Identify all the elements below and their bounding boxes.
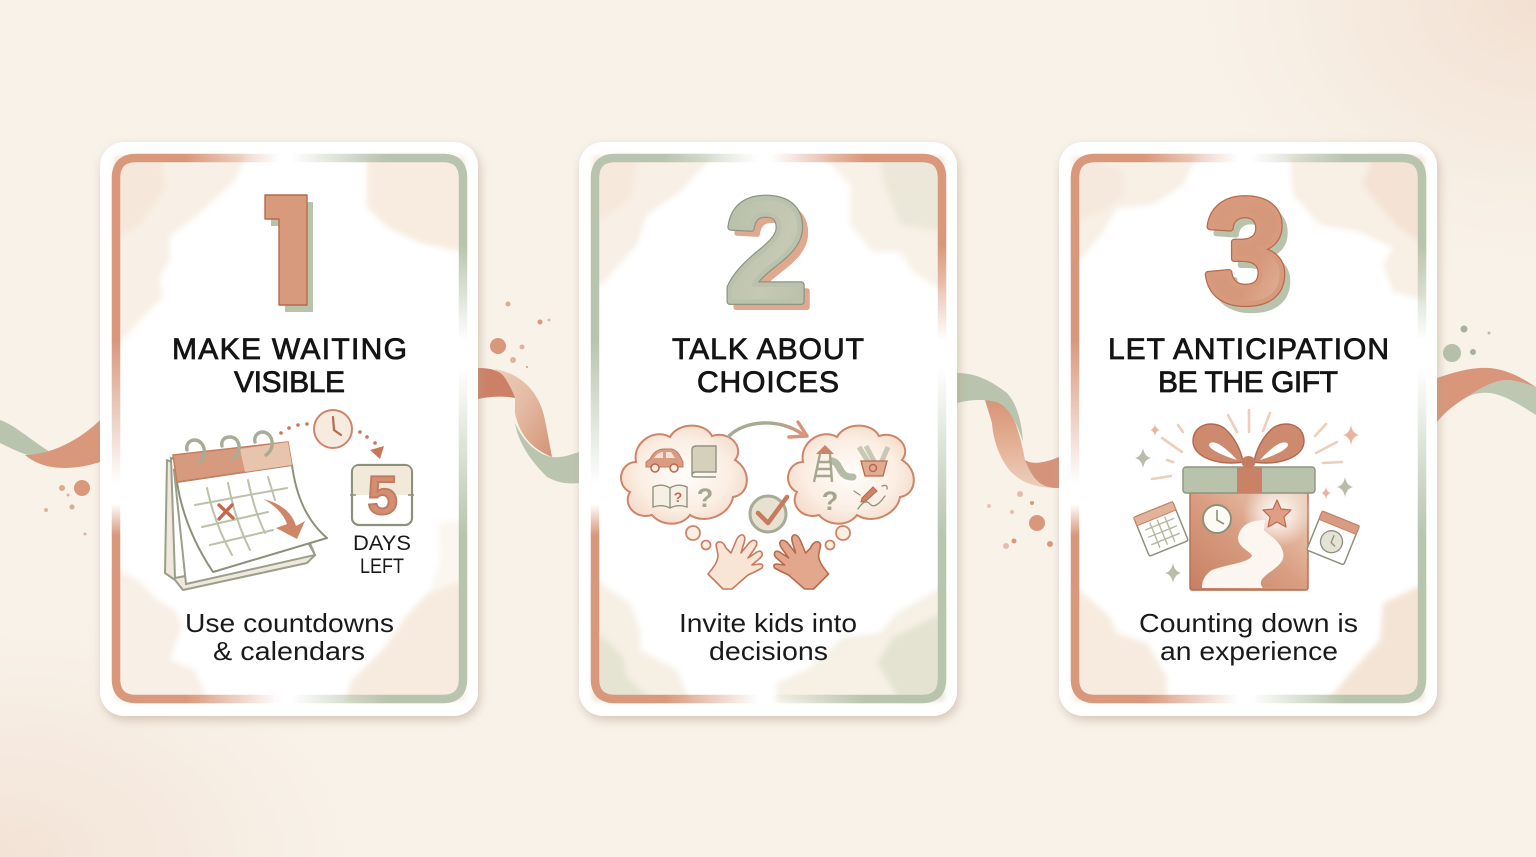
watercolor stains card 1 — [114, 156, 465, 701]
number 1: 1 — [246, 172, 328, 337]
small calendars — [1134, 502, 1188, 556]
heading card 2: TALK ABOUT — [672, 333, 864, 366]
watercolor stains card 3 — [1073, 156, 1424, 701]
number 2: 2 — [725, 168, 807, 334]
sage splashes — [1443, 326, 1490, 362]
heading card 2: CHOICES — [697, 366, 839, 399]
caption card 1 — [185, 608, 394, 666]
icon: five days left tile: 5 — [367, 464, 398, 526]
number 2: 2 — [731, 174, 813, 340]
sparkles — [1135, 448, 1353, 583]
heading card 3 — [1108, 333, 1389, 399]
caption card 1: Use countdowns — [185, 608, 394, 638]
frame card 1 — [116, 158, 463, 699]
caption card 2: Invite kids into — [679, 608, 857, 638]
icon: dotted path with clock — [279, 410, 384, 459]
icon: five days left tile: DAYS — [353, 532, 411, 555]
caption card 2: decisions — [709, 636, 828, 666]
ribbon: left of card 1 — [0, 420, 100, 468]
caption card 3: Counting down is — [1139, 608, 1358, 638]
ribbon: between cards 2 and 3 — [957, 373, 1059, 488]
panel: card 3 — [1059, 142, 1437, 716]
panel: card 1 — [100, 142, 478, 716]
frame card 2 — [595, 158, 942, 699]
frame card 3 — [1075, 158, 1422, 699]
ribbon: between cards 1 and 2 — [478, 368, 579, 483]
panel: card 2 — [579, 142, 957, 716]
ribbon: right of card 3 — [1437, 368, 1536, 422]
icon: five days left tile: LEFT — [360, 555, 404, 578]
icon: thought cloud right: ? — [822, 486, 838, 516]
number 3: 3 — [1205, 169, 1287, 334]
thought bubbles — [686, 526, 850, 550]
heading card 3: LET ANTICIPATION — [1108, 333, 1389, 366]
heading card 1: VISIBLE — [234, 366, 345, 399]
heading card 2 — [672, 333, 864, 399]
number 1 — [264, 194, 313, 312]
caption card 2 — [679, 608, 857, 666]
heading card 1: MAKE WAITING — [172, 333, 407, 366]
heading card 3: BE THE GIFT — [1158, 366, 1338, 399]
icon: thought cloud left: ? — [697, 483, 713, 513]
icon: thought cloud left: ? — [674, 489, 682, 505]
number 3: 3 — [1211, 176, 1293, 341]
watercolor stains card 2 — [593, 156, 944, 701]
icon: thought cloud right — [788, 426, 914, 524]
icon: calendar — [165, 432, 327, 590]
icon: thought cloud left — [621, 426, 747, 524]
caption card 1: & calendars — [213, 636, 365, 666]
number 3: 3 — [1205, 169, 1287, 334]
heading card 1 — [172, 333, 407, 399]
icon: hands — [708, 535, 829, 589]
caption card 3: an experience — [1160, 636, 1338, 666]
caption card 3 — [1139, 608, 1358, 666]
arrow between clouds — [729, 422, 807, 437]
icon: gift box — [1134, 410, 1359, 590]
rays — [1152, 410, 1342, 479]
number 1: 1 — [252, 179, 334, 344]
icon: five days left tile — [350, 464, 414, 578]
paint splashes — [44, 302, 1053, 549]
icon: check circle — [750, 496, 787, 532]
number 2: 2 — [725, 168, 807, 334]
